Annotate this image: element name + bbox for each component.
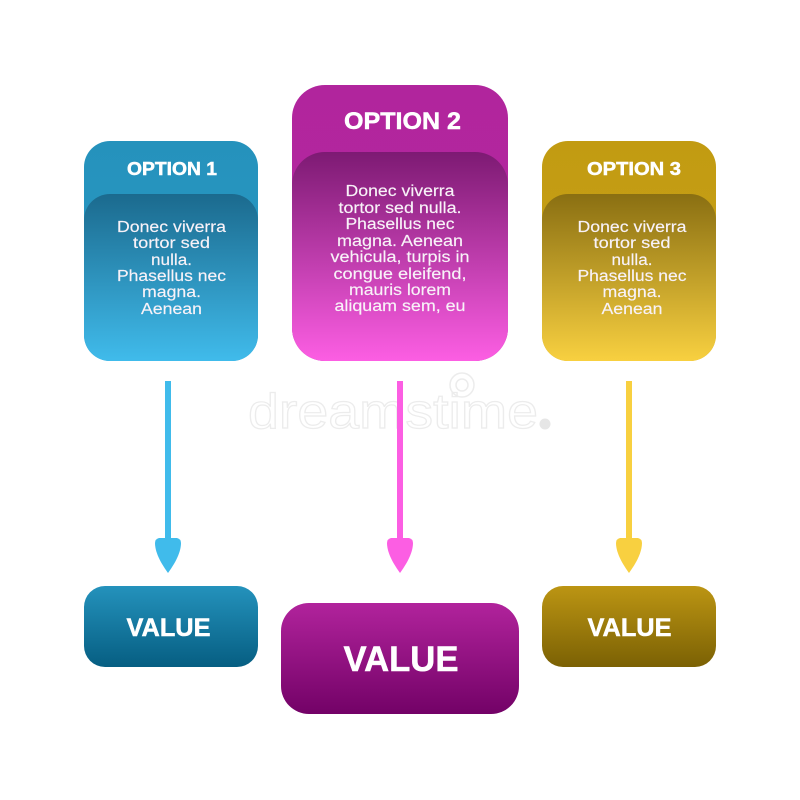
value box: option 1 [84,586,258,667]
heading: option 1: OPTION 1 [127,158,217,179]
value box: option 2: VALUE [344,640,458,679]
text block: option 1 body: tortor sed [133,235,210,252]
text block: option 1 body: Phasellus nec [117,268,226,285]
text block: option 2 body [330,183,470,315]
text block: option 2 body: Phasellus nec [346,216,455,233]
watermark: dreamstime [248,373,550,439]
text block: option 2 body: mauris lorem [349,282,451,299]
panel: option 2 [292,85,508,361]
text block: option 3 body: magna. [602,284,662,301]
text block: option 2 body: congue eleifend, [334,266,466,283]
text block: option 2 body: vehicula, turpis in [330,249,470,266]
text block: option 1 body: magna. [142,284,201,301]
value box: option 3 [542,586,716,667]
text block: option 1 body [117,219,226,318]
panel: option 1 [84,141,258,361]
text block: option 3 body: tortor sed [594,235,670,252]
value box: option 3: VALUE [588,614,672,642]
heading: option 3: OPTION 3 [587,158,681,179]
text block: option 3 body: nulla. [612,252,652,269]
text block: option 2 body: aliquam sem, eu [334,298,466,315]
text block: option 3 body: Phasellus nec [578,268,687,285]
text block: option 3 body: Aenean [602,301,662,318]
text block: option 3 body: Donec viverra [578,219,687,236]
inner panel: option 2 body [292,152,508,361]
value box: option 2 [281,603,519,714]
text block: option 3 body [578,219,687,318]
arrow: option 1 to value [155,381,181,573]
watermark: dreamstime: dreamstime [248,385,538,439]
text block: option 1 body: Donec viverra [117,219,226,236]
text block: option 1 body: Aenean [141,301,202,318]
text block: option 2 body: tortor sed nulla. [338,200,462,217]
value box: option 1: VALUE [126,614,210,642]
arrow: option 2 to value [387,381,413,573]
text block: option 1 body: nulla. [151,252,192,269]
inner panel: option 3 body [542,194,716,361]
heading: option 2: OPTION 2 [344,108,461,135]
inner panel: option 1 body [84,194,258,361]
arrow: option 3 to value [616,381,642,573]
panel: option 3 [542,141,716,361]
text block: option 2 body: magna. Aenean [337,233,463,250]
text block: option 2 body: Donec viverra [346,183,455,200]
